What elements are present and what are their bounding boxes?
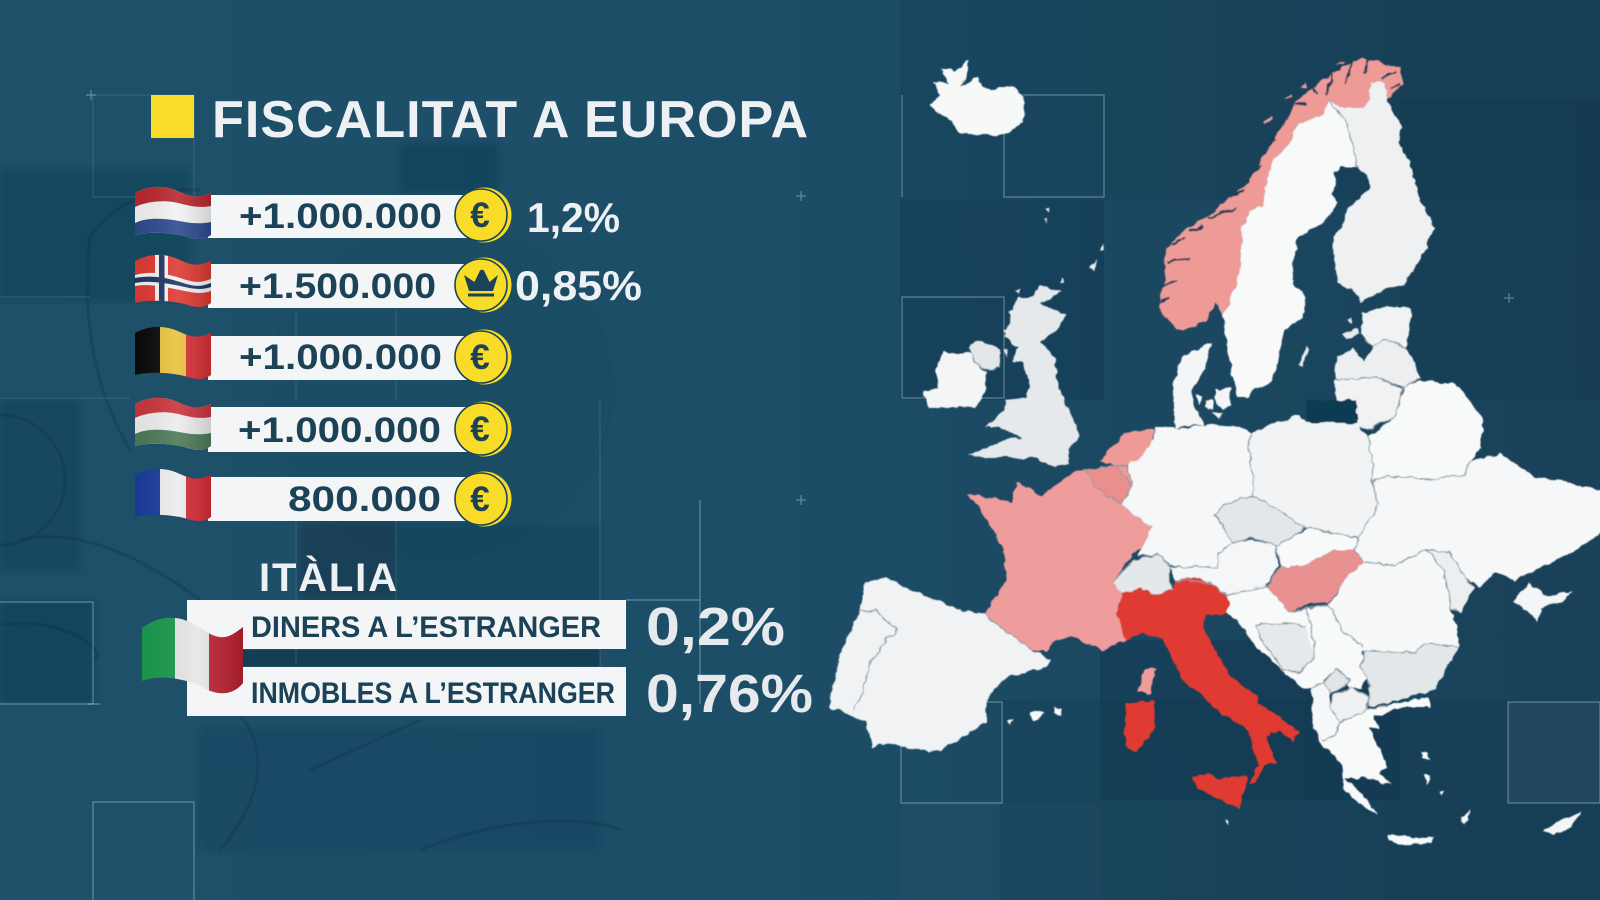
icon: Norwegian flag: [135, 254, 211, 307]
Iceland: [929, 60, 1025, 135]
bar: money abroad: [187, 600, 626, 649]
United Kingdom: [968, 285, 1079, 467]
bar: [208, 407, 480, 452]
Italy: [1117, 577, 1298, 783]
icon: yellow square: [151, 95, 194, 138]
Sardinia: [1125, 701, 1155, 752]
Norway fjords: [1160, 58, 1400, 302]
Sweden: [1223, 100, 1357, 398]
Netherlands: [1100, 430, 1154, 487]
icon: crown coin: [455, 258, 512, 312]
icon: euro coin: €: [470, 480, 490, 519]
map of Europe: [828, 57, 1600, 846]
Crete: [1387, 835, 1435, 846]
Finland: [1328, 80, 1435, 302]
Albania: [1311, 682, 1339, 740]
Germany: [1122, 425, 1253, 568]
Belarus: [1368, 380, 1483, 482]
Ukraine: [1354, 453, 1600, 587]
amount: +1.000.000: [238, 411, 441, 450]
bar: [208, 477, 480, 521]
label: money abroad: DINERS A L’ESTRANGER: [251, 611, 601, 644]
row: Belgium: [135, 325, 512, 385]
icon: euro coin: [455, 330, 512, 384]
bar: [208, 195, 480, 238]
title: FISCALITAT A EUROPA: [212, 91, 808, 149]
icon: euro coin: €: [470, 410, 490, 449]
Corsica: [1138, 668, 1155, 695]
heading: Italy: ITÀLIA: [259, 555, 397, 600]
icon: euro coin: €: [470, 196, 490, 235]
icon: Hungarian flag: [135, 398, 211, 450]
Czech Republic: [1216, 495, 1304, 545]
amount: 800.000: [288, 480, 441, 519]
Northern Ireland: [968, 340, 1000, 370]
Crimea: [1513, 583, 1573, 622]
rate: property abroad: 0,76%: [646, 664, 813, 724]
Greek islands: [1225, 752, 1469, 826]
Danish islands: [1196, 388, 1231, 418]
Lithuania: [1334, 377, 1402, 430]
Spain and Portugal: [828, 577, 1052, 752]
amount: +1.000.000: [239, 197, 442, 236]
icon: French flag: [135, 468, 211, 521]
Bosnia: [1256, 623, 1314, 673]
panel: Italy: [142, 555, 813, 724]
row: Netherlands: [135, 185, 620, 245]
amount: +1.500.000: [239, 267, 436, 306]
title block: [151, 91, 808, 149]
Sicily: [1193, 773, 1248, 808]
Estonia: [1361, 307, 1412, 347]
Balearic islands: [1007, 707, 1062, 725]
icon: Italian flag: [142, 618, 243, 694]
North Macedonia: [1331, 688, 1369, 722]
icon: euro coin: [455, 472, 512, 526]
Poland: [1248, 415, 1379, 537]
Greece: [1314, 697, 1430, 815]
Belgium: [1085, 465, 1132, 503]
row: Norway: [135, 253, 642, 313]
icon: Belgian flag: [135, 326, 211, 379]
bar: [208, 336, 480, 380]
Bulgaria: [1362, 643, 1460, 707]
icon: euro coin: €: [470, 338, 490, 377]
Latvia: [1334, 340, 1420, 387]
Romania: [1329, 550, 1460, 653]
amount: +1.000.000: [239, 338, 442, 377]
Denmark: [1173, 342, 1211, 427]
Norway: [1159, 57, 1403, 330]
Cyprus: [1543, 812, 1581, 835]
Hungary: [1266, 550, 1364, 612]
Switzerland: [1112, 555, 1173, 595]
country borders: [853, 100, 1475, 740]
label: property abroad: INMOBLES A L’ESTRANGER: [251, 677, 615, 710]
Slovenia and Croatia: [1228, 585, 1324, 690]
Norway islands: [1262, 61, 1345, 124]
Ireland: [923, 352, 987, 408]
Moldova: [1427, 550, 1475, 613]
icon: Dutch flag: [135, 186, 211, 239]
Kosovo: [1324, 668, 1349, 693]
France: [966, 468, 1153, 653]
Austria: [1170, 540, 1278, 595]
icon: euro coin: [455, 188, 512, 242]
bar: property abroad: [187, 667, 626, 716]
bar: [208, 264, 480, 308]
Kaliningrad: [1307, 400, 1357, 423]
rate: 1,2%: [527, 194, 620, 241]
icon: euro coin: [455, 402, 512, 456]
rate: 0,85%: [515, 262, 642, 309]
row: France: [135, 467, 512, 527]
rate: money abroad: 0,2%: [646, 597, 785, 657]
northern islands: [1004, 206, 1359, 367]
row: Hungary: [135, 396, 512, 456]
Serbia: [1299, 605, 1369, 688]
Slovakia: [1276, 528, 1359, 567]
